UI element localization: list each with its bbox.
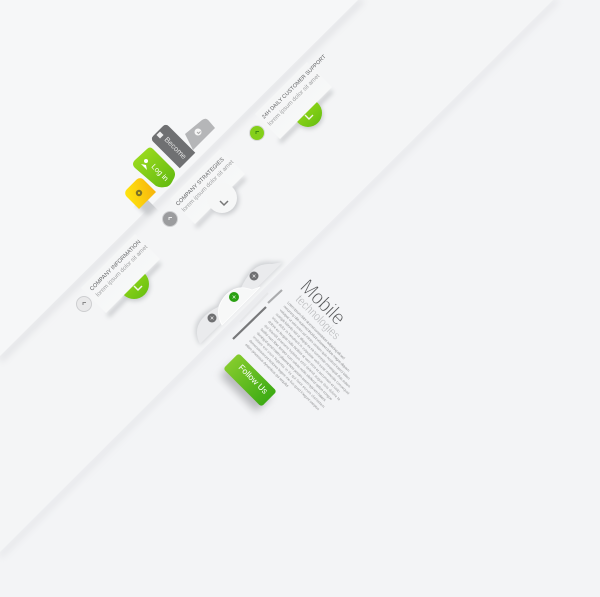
button: Follow Us: Follow Us (237, 362, 270, 396)
body text block: dolore eu feugiat nulla facilisis at vero eros et accumsan et iusto (267, 320, 341, 394)
tab: Log in: Log in (150, 162, 170, 183)
panel: company information: lorem ipsum dolor sit amet (95, 244, 149, 298)
body text block (244, 301, 365, 422)
panel: company strategies: COMPANY STRATEGIES (175, 157, 226, 207)
panel: company strategies (162, 149, 245, 227)
panel: 24h daily customer support (250, 54, 332, 142)
body text block: Lorem ipsum dolor sit amet consectetuer adipiscing elit sed (286, 301, 346, 360)
body text block: suscipit lobortis nisl ut aliquip ex ea commodo consequat duis autem (275, 312, 351, 389)
body text block: etiam processus dynamicus qui sequitur (244, 343, 290, 389)
cloud panel with three buttons: × (232, 294, 236, 302)
body text block: iriure dolor in hendrerit in vulputate velit esse molestie consequat (271, 316, 350, 395)
cloud panel with three buttons (195, 262, 284, 345)
tab: light grey clock (185, 119, 215, 150)
title: Mobile technologies: technologies (293, 292, 343, 342)
body text block: nonummy nibh euismod tincidunt ut laoreet dolore magna aliquam (282, 305, 350, 373)
body text block: doming id quod mazim placerat facer possim assum typi non habent (256, 331, 326, 402)
panel: company information (76, 234, 160, 316)
body text block: facilisi nam liber tempor cum soluta nobis eleifend option congue (260, 328, 333, 401)
tab: yellow (125, 178, 157, 216)
body text block: insitam est usus legentis in iis qui facit eorum claritatem (252, 335, 325, 409)
cloud panel with three buttons: × (252, 274, 256, 280)
title: Mobile technologies: Mobile (295, 275, 350, 330)
body text block: qui blandit praesent luptatum zzril delenit augue duis dolore te (263, 324, 341, 402)
tab: Log in (133, 148, 175, 187)
panel: 24h daily customer support: 24H DAILY CUSTOMER SUPPORT (261, 54, 328, 120)
panel: 24h daily customer support: lorem ipsum dolor sit amet (267, 73, 321, 127)
body text block: demonstraverunt lectores legere me lius quod ii legunt saepius (248, 339, 320, 411)
cloud panel with three buttons: × (210, 316, 214, 322)
button: Follow Us (220, 353, 277, 412)
tab: Become a member: Become (163, 135, 188, 161)
body text block: volutpat ut wisi enim ad minim veniam quis nostrud exerci tation (279, 309, 351, 381)
panel: company strategies: lorem ipsum dolor sit amet (181, 159, 235, 213)
tab: Become a member (152, 124, 196, 168)
panel: company information: COMPANY INFORMATION (89, 239, 142, 292)
divider bars (233, 290, 282, 339)
